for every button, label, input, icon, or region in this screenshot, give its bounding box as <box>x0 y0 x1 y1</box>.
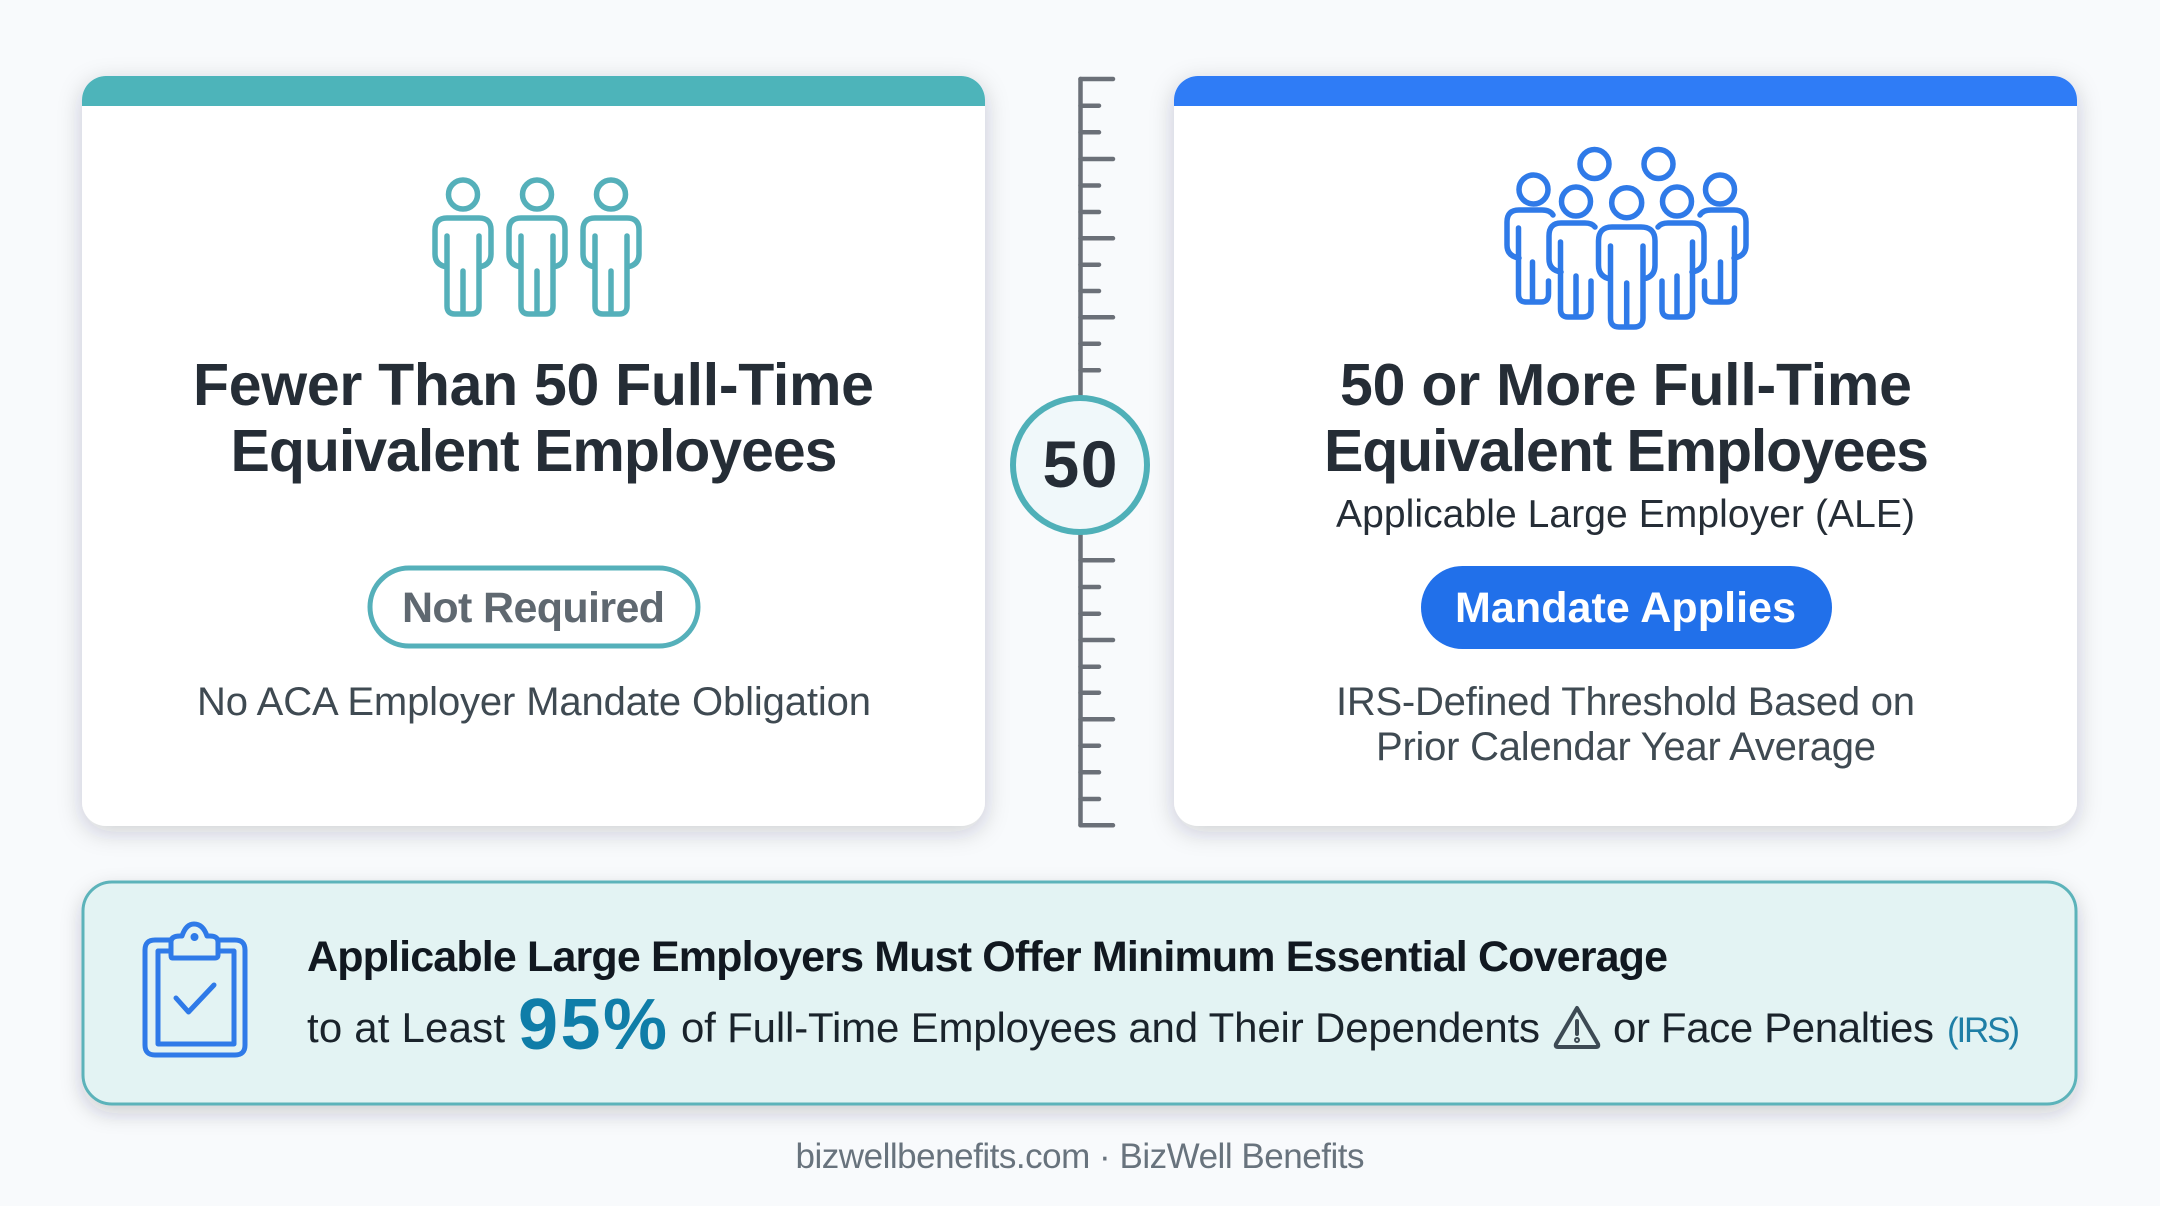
icon: warning triangle <box>1556 1008 1598 1047</box>
text: IRS threshold: Prior Calendar Year Average <box>1376 725 1876 769</box>
banner: minimum essential coverage <box>83 882 2076 1104</box>
heading: 50 or more <box>1324 352 1929 484</box>
pill: not required <box>370 568 698 646</box>
banner headline: Applicable Large Employers Must Offer Minimum Essential Coverage <box>307 933 1668 981</box>
banner detail line: or Face Penalties <box>1613 1004 1934 1051</box>
panel: 50 or more employees <box>1174 76 2077 826</box>
icon: clipboard <box>145 924 245 1055</box>
source: IRS: (IRS) <box>1947 1011 2020 1050</box>
icon: three people <box>435 180 639 314</box>
threshold marker: 50 <box>1013 398 1147 532</box>
text: IRS threshold: IRS-Defined Threshold Based on <box>1336 680 1915 724</box>
heading: fewer than 50 <box>193 352 874 484</box>
threshold marker: 50: 50 <box>1042 427 1118 501</box>
pill: mandate applies <box>1421 566 1832 649</box>
heading: 50 or more: Equivalent Employees <box>1324 418 1929 484</box>
ruler scale <box>1080 79 1113 825</box>
text: no obligation: No ACA Employer Mandate Obligation <box>197 680 871 724</box>
heading: fewer than 50: Equivalent Employees <box>230 418 838 484</box>
pill: not required: Not Required <box>402 584 665 632</box>
pill: mandate applies: Mandate Applies <box>1455 584 1796 632</box>
heading: fewer than 50: Fewer Than 50 Full-Time <box>193 352 874 418</box>
subheading: ALE: Applicable Large Employer (ALE) <box>1336 493 1915 536</box>
blue top bar <box>1174 76 2077 106</box>
banner detail line: of Full-Time Employees and Their Dependents <box>681 1004 1540 1051</box>
teal top bar <box>82 76 985 106</box>
banner detail line <box>307 985 2020 1065</box>
banner detail line: to at Least <box>307 1004 505 1051</box>
text: IRS threshold <box>1336 680 1915 769</box>
footer: bizwellbenefits.com · BizWell Benefits <box>796 1137 1364 1176</box>
heading: 50 or more: 50 or More Full-Time <box>1340 352 1912 418</box>
icon: group of people <box>1507 150 1746 327</box>
panel: fewer than 50 employees <box>82 76 985 826</box>
stat: 95%: 95% <box>518 985 667 1065</box>
